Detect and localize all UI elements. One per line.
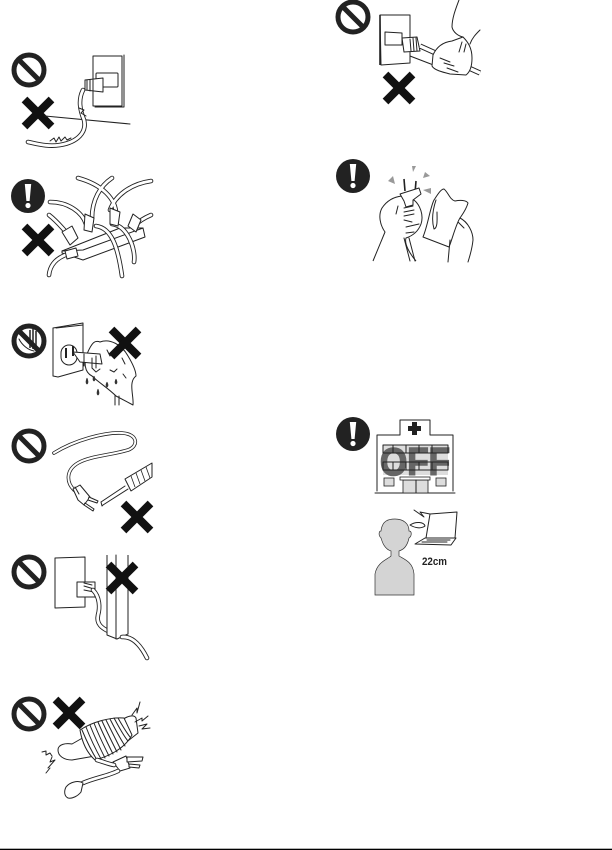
- icon: exclamation sign: [11, 179, 45, 213]
- illustration: power cord and screwdriver: [54, 433, 152, 511]
- icon: exclamation sign: [336, 159, 370, 193]
- icon: prohibition sign: [14, 699, 44, 729]
- illustration: hands wiping plug with cloth: [373, 166, 473, 262]
- icon: black cross: [24, 100, 52, 126]
- icon: prohibition sign: [338, 2, 368, 32]
- illustration: hospital building: [375, 420, 455, 493]
- illustration: cord pinched by column: [55, 555, 147, 658]
- panel: damaged cord pinched under edge: [14, 55, 130, 146]
- panel: do not pull the cord: [338, 0, 480, 102]
- icon: exclamation sign: [336, 417, 370, 451]
- icon: black cross: [386, 74, 412, 102]
- icon: wet hand prohibition sign: [14, 326, 44, 356]
- icon: black cross: [24, 226, 52, 254]
- illustration: person and laptop at 22 cm: [375, 510, 457, 595]
- panel: clean the plug: [336, 159, 473, 262]
- panel: overloaded power strip: [11, 178, 151, 276]
- illustration: coiled cord with sparks: [42, 702, 150, 798]
- illustration: power strip with many cords: [49, 178, 151, 276]
- bottom rule: [0, 849, 612, 850]
- illustration: damaged cord at wall outlet: [28, 55, 130, 146]
- icon: prohibition sign: [14, 431, 44, 461]
- icon: prohibition sign: [14, 557, 44, 587]
- icon: black cross: [108, 564, 136, 592]
- icon: black cross: [112, 330, 138, 356]
- icon: black cross: [56, 700, 82, 726]
- label: OFF: OFF: [380, 441, 450, 484]
- panel: do not modify the cord: [14, 431, 152, 530]
- label: 22cm: 22cm: [422, 556, 447, 568]
- panel: do not coil the cord: [14, 699, 150, 798]
- illustration: wet hand at outlet: [53, 323, 136, 405]
- icon: black cross: [124, 504, 150, 530]
- panel: do not pinch the cord behind furniture: [14, 555, 147, 658]
- illustration: hand pulling cord from outlet: [380, 0, 480, 75]
- panel: do not touch plug with wet hands: [14, 323, 138, 405]
- panel: turn off in hospital: [336, 417, 457, 595]
- icon: prohibition sign: [14, 55, 44, 85]
